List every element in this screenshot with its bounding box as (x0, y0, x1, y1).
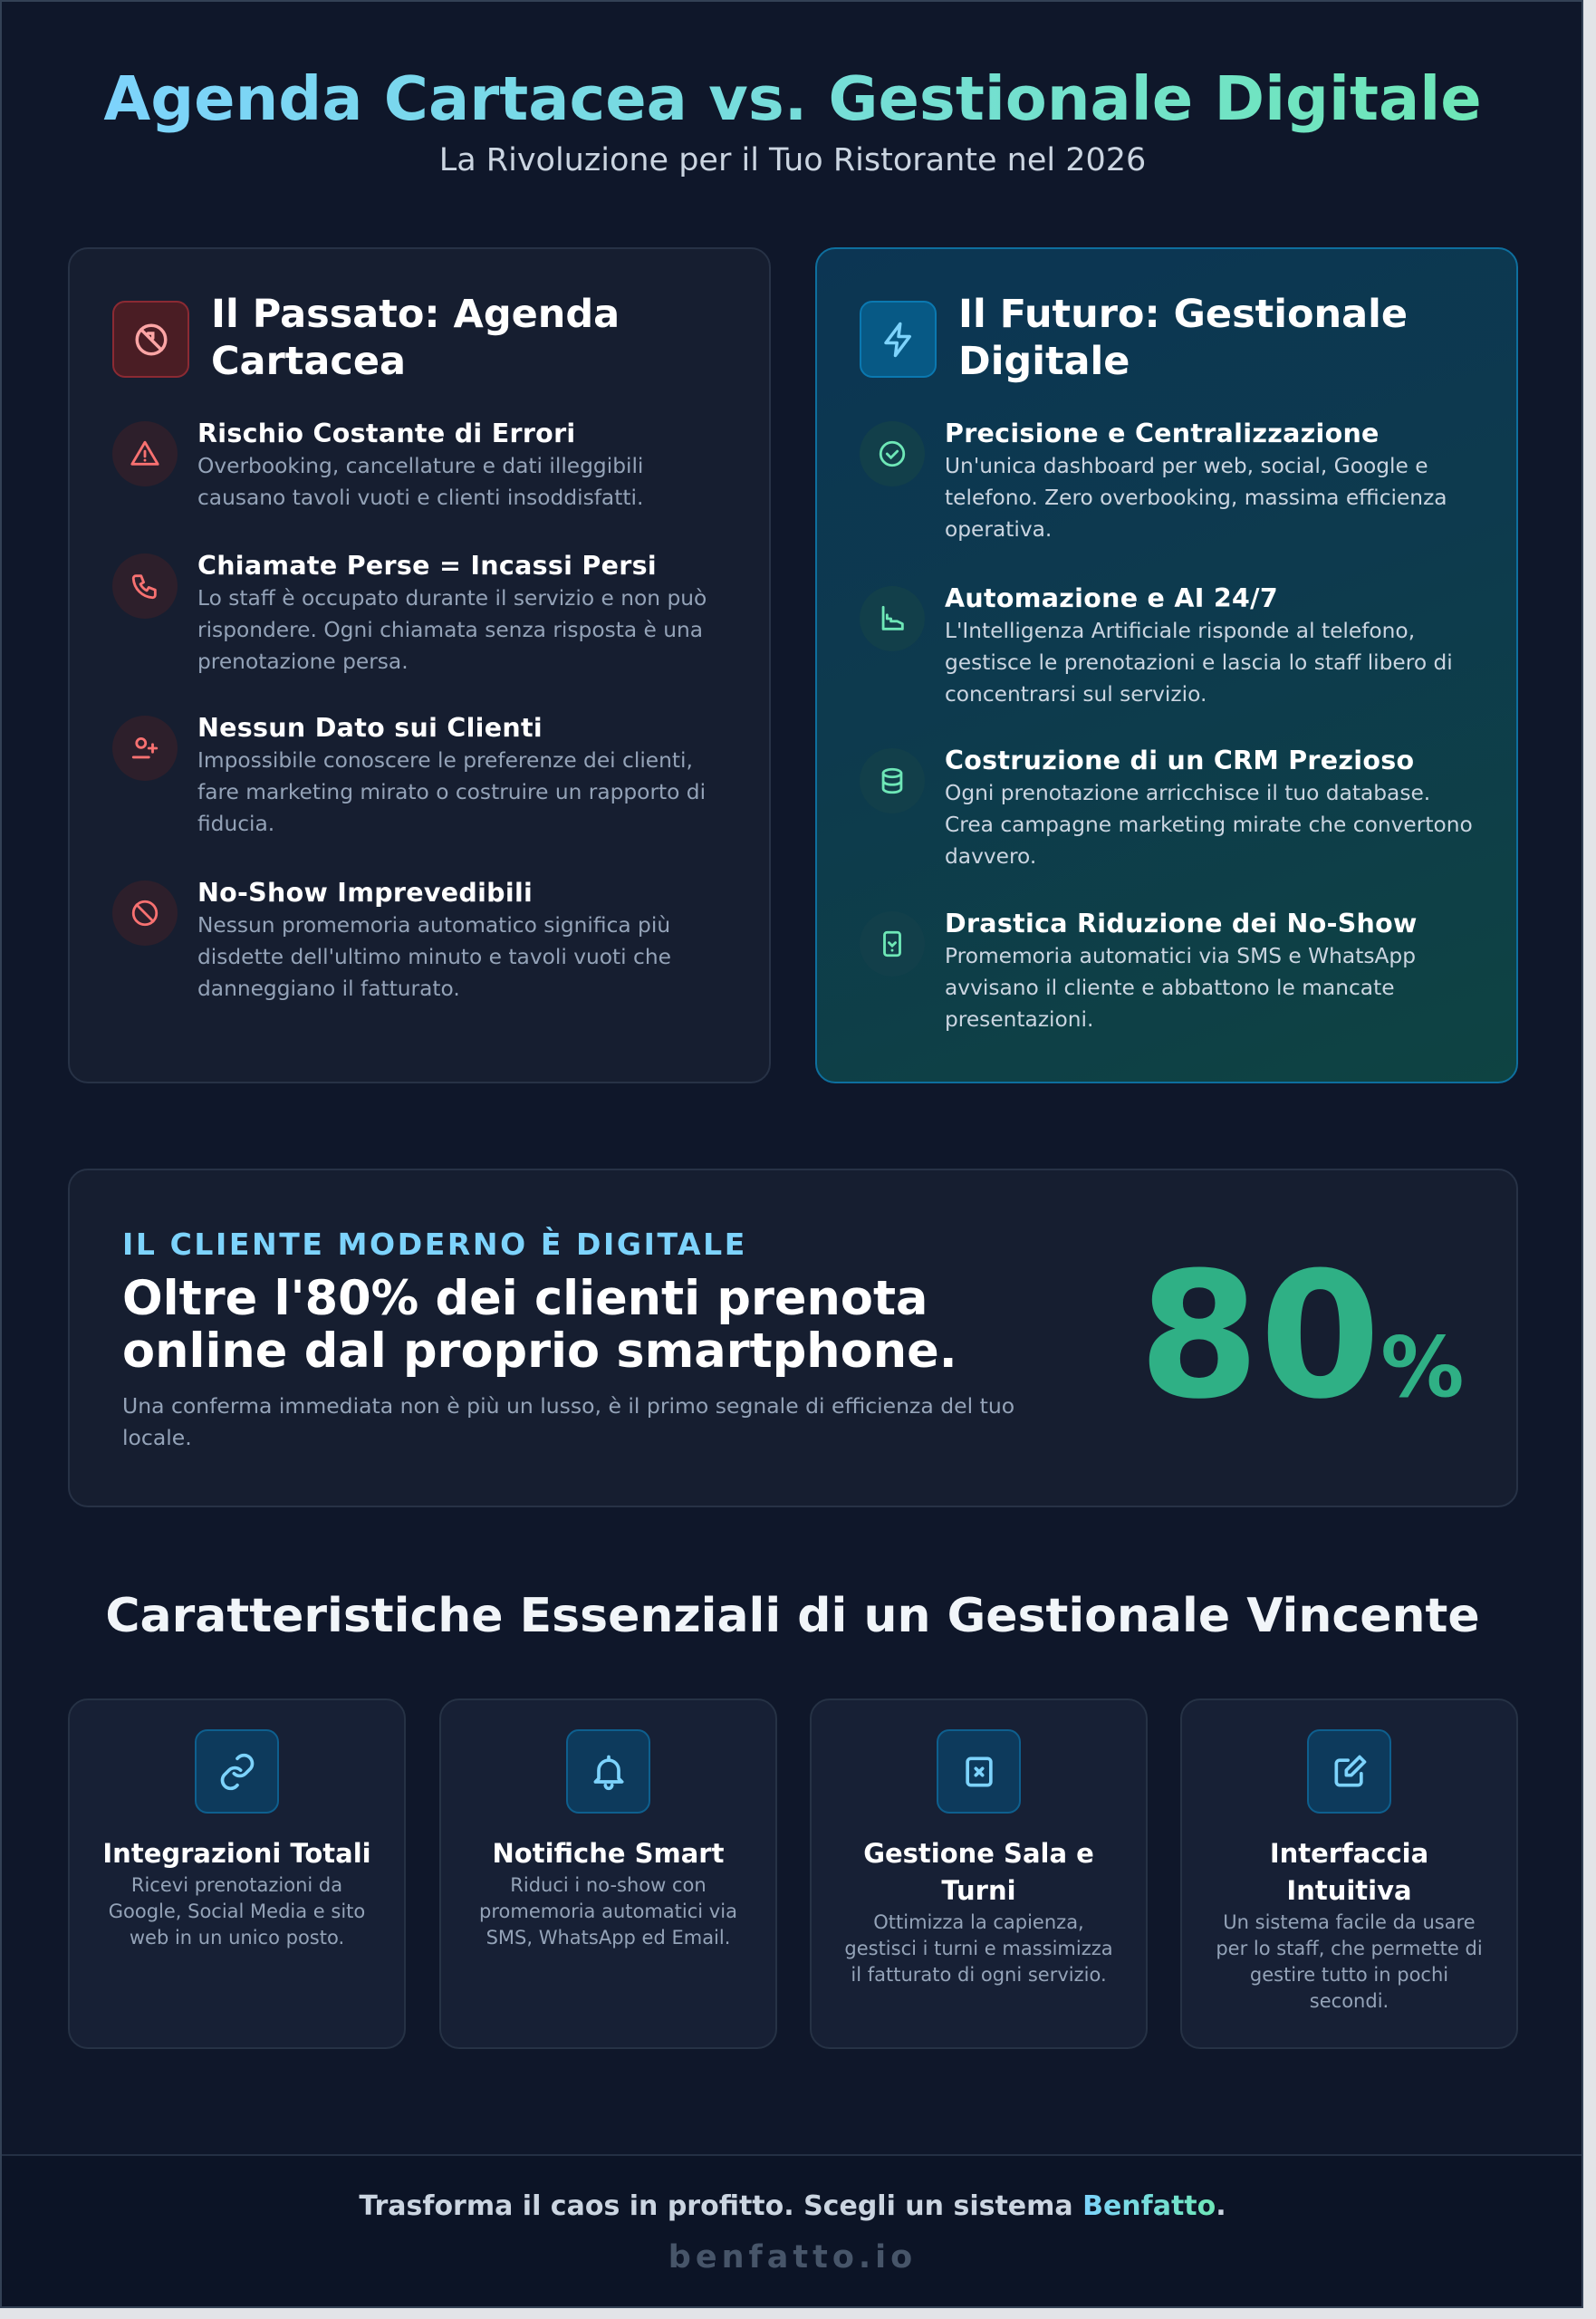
item: automation: L'Intelligenza Artificiale risponde al telefono, gestisce le prenotazioni e lascia lo staff libero di concentrarsi sul servizio. (945, 619, 1453, 707)
card: notifications: Notifiche Smart (493, 1838, 724, 1869)
section heading: Caratteristiche Essenziali di un Gestionale Vincente (105, 1589, 1480, 1643)
card: interface: Un sistema facile da usare per lo staff, che permette di gestire tutto in pochi secondi. (1216, 1911, 1483, 2012)
icon: bell (566, 1729, 650, 1814)
card: interface: Interfaccia Intuitiva (1270, 1838, 1428, 1906)
heading: future: Il Futuro: Gestionale Digitale (958, 292, 1408, 384)
stat label: IL CLIENTE MODERNO È DIGITALE (122, 1227, 747, 1262)
heading: past: Il Passato: Agenda Cartacea (211, 292, 620, 384)
item: errors: Overbooking, cancellature e dati illeggibili causano tavoli vuoti e clienti insoddisfatti. (197, 454, 643, 510)
icon: phone check (860, 911, 925, 977)
item: precision: Precisione e Centralizzazione (945, 419, 1380, 448)
card: room management: Gestione Sala e Turni (863, 1838, 1094, 1906)
card: interface (1180, 1698, 1518, 2049)
item: no-show: Nessun promemoria automatico significa più disdette dell'ultimo minuto e tavoli vuoti che danneggiano il fatturato. (197, 913, 671, 1001)
item: errors: Rischio Costante di Errori (197, 419, 576, 448)
panel: past (paper agenda) (68, 247, 771, 1083)
icon: link (195, 1729, 279, 1814)
icon: hand (860, 586, 925, 651)
footer (2, 2154, 1583, 2310)
item: automation (882, 583, 1453, 707)
item: precision (879, 419, 1447, 542)
item: no-show reduction: Drastica Riduzione dei No-Show (945, 909, 1418, 938)
item: no data: Impossibile conoscere le preferenze dei clienti, fare marketing mirato o costruire un rapporto di fiducia. (197, 748, 706, 836)
icon: lightning (860, 301, 937, 378)
item: CRM: Costruzione di un CRM Prezioso (945, 746, 1414, 775)
item: CRM: Ogni prenotazione arricchisce il tuo database. Crea campagne marketing mirate che convertono davvero. (945, 781, 1473, 869)
icon: edit (1307, 1729, 1391, 1814)
item: no-show (112, 878, 671, 1001)
icon: check (860, 421, 925, 486)
item: no data: Nessun Dato sui Clienti (197, 713, 543, 743)
icon: warning (112, 421, 178, 486)
card: notifications: Riduci i no-show con promemoria automatici via SMS, WhatsApp ed Email. (479, 1874, 737, 1949)
icon: database (860, 748, 925, 813)
icon: user plus (112, 716, 178, 781)
icon: square x (937, 1729, 1021, 1814)
card: integrations: Ricevi prenotazioni da Google, Social Media e sito web in un unico posto. (109, 1874, 365, 1949)
panel: future (digital) (815, 247, 1518, 1083)
card: integrations (68, 1698, 406, 2049)
subtitle: La Rivoluzione per il Tuo Ristorante nel 2026 (439, 142, 1146, 178)
icon: ban (112, 301, 189, 378)
card: notifications (439, 1698, 777, 2049)
item: no-show reduction (883, 909, 1418, 1032)
item: no-show: No-Show Imprevedibili (197, 878, 533, 908)
item: CRM (882, 746, 1473, 869)
card: room management (810, 1698, 1148, 2049)
footer url: benfatto.io (668, 2239, 917, 2276)
item: lost calls: Chiamate Perse = Incassi Persi (197, 551, 657, 581)
item: lost calls (112, 551, 707, 674)
item: errors (112, 419, 643, 510)
item: lost calls: Lo staff è occupato durante il servizio e non può rispondere. Ogni chiamata senza risposta è una prenotazione persa. (197, 586, 707, 674)
card: room management: Ottimizza la capienza, gestisci i turni e massimizza il fatturato di ogni servizio. (844, 1911, 1113, 1986)
item: no-show reduction: Promemoria automatici via SMS e WhatsApp avvisano il cliente e abbattono le mancate presentazioni. (945, 944, 1416, 1032)
big number 80%: 80% (1139, 1236, 1464, 1438)
stat body: Una conferma immediata non è più un lusso, è il primo segnale di efficienza del tuo locale. (122, 1393, 1014, 1450)
item: no data (112, 713, 706, 836)
stat headline: Oltre l'80% dei clienti prenota online dal proprio smartphone. (122, 1271, 957, 1379)
title: Agenda Cartacea vs. Gestionale Digitale (103, 63, 1482, 134)
card: integrations: Integrazioni Totali (102, 1838, 371, 1869)
icon: ban (112, 880, 178, 946)
icon: phone (112, 553, 178, 619)
footer tagline: Trasforma il caos in profitto. Scegli un sistema Benfatto. (359, 2190, 1226, 2222)
item: automation: Automazione e AI 24/7 (945, 583, 1278, 613)
panel: statistic (68, 1169, 1518, 1507)
item: precision: Un'unica dashboard per web, social, Google e telefono. Zero overbooking, massima efficienza operativa. (945, 454, 1447, 542)
